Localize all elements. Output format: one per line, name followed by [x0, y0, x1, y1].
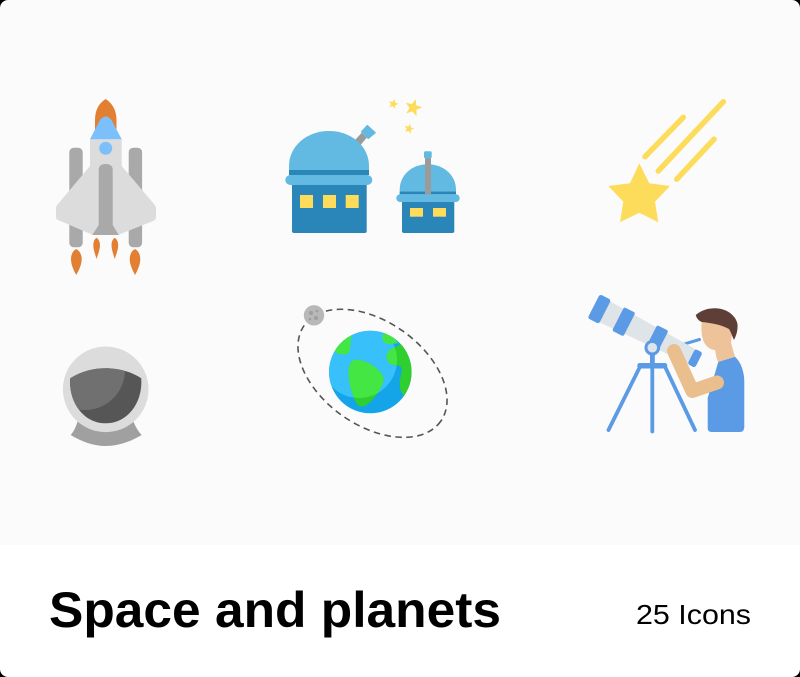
hair	[696, 308, 738, 340]
small dome	[400, 164, 456, 194]
mount ring	[646, 341, 659, 354]
icon: astronaut helmet	[63, 346, 148, 446]
tube	[600, 302, 696, 364]
arm	[674, 351, 717, 391]
panel: footer	[0, 545, 800, 677]
title: Space and planets	[49, 582, 501, 638]
stars	[406, 99, 422, 116]
icon: space shuttle	[56, 99, 156, 275]
icon count: 25 Icons	[636, 599, 751, 630]
tripod	[606, 366, 697, 434]
eyepiece rod	[683, 340, 700, 344]
icon: shooting star	[608, 102, 723, 222]
large telescope barrel	[356, 133, 366, 145]
body	[708, 357, 744, 432]
icon: earth with orbiting moon	[297, 305, 448, 438]
icon: person using telescope	[588, 294, 744, 432]
head and neck	[701, 322, 735, 362]
large dome	[289, 131, 369, 170]
icon: observatories and stars	[285, 99, 460, 233]
